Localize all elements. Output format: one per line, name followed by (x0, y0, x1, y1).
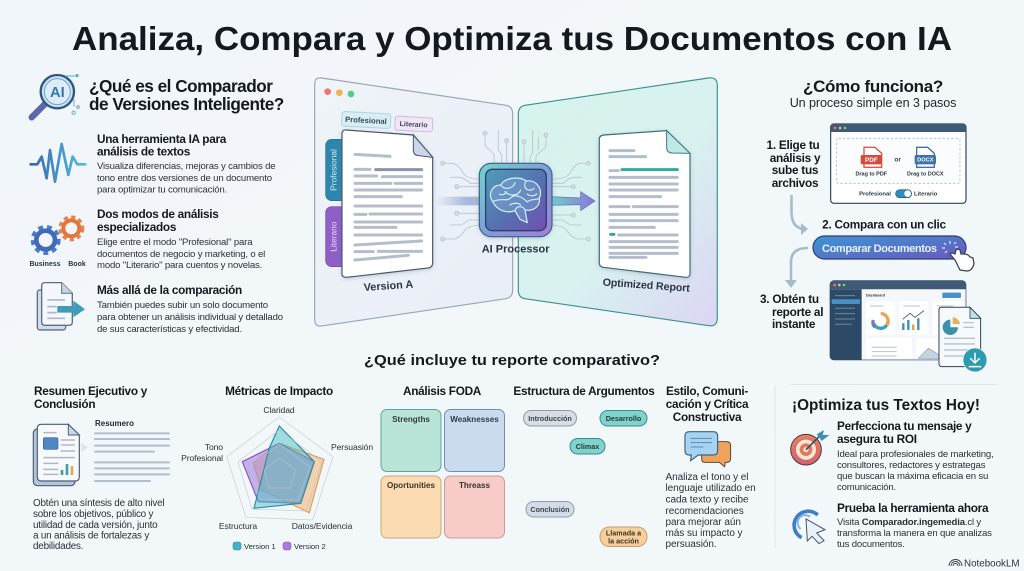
text block: dos modos (97, 207, 265, 271)
step 1 upload window: Literario (914, 192, 938, 198)
toggle (896, 190, 912, 198)
step 3 label: 3. Obtén tu (760, 292, 819, 306)
quadrant: oportunities (381, 476, 441, 538)
icon: summary document: Resumero (95, 419, 134, 428)
icon: AI magnifier: AI (50, 85, 65, 101)
text block: perfecciona: comunicación. (837, 482, 896, 493)
step 3 label: instante (772, 317, 816, 331)
icon: report with download (939, 307, 987, 372)
step 1 upload window: or (894, 157, 901, 164)
heading: estilo: Estilo, Comuni- (666, 384, 748, 398)
text block: una herramienta: análisis de textos (97, 144, 191, 158)
step 1 upload window: Drag to DOCX (907, 172, 944, 178)
step 3 label: reporte al (772, 305, 823, 319)
text block: perfecciona: consultores, redactores y estrategas (837, 460, 986, 471)
text block: estilo: recomendaciones (666, 506, 744, 517)
text block: estilo: para mejorar aún (666, 517, 741, 528)
text block: resumen: sobre los objetivos, público y (33, 509, 154, 520)
panel: métricas de impacto (181, 384, 373, 551)
radar legend (233, 542, 326, 551)
tab: literario (395, 116, 433, 132)
heading: FODA: Análisis FODA (403, 384, 482, 398)
text block: estilo: lenguaje utilizado en (666, 483, 756, 494)
compare button (813, 236, 966, 259)
quadrant: weaknesses: Weaknesses (450, 415, 499, 424)
text block: una herramienta: Una herramienta IA para (97, 132, 227, 146)
circuit connectors (441, 130, 590, 241)
tab: literario: Literario (399, 121, 428, 129)
heading: qué es: ¿Qué es el Comparador (89, 76, 273, 96)
icon: document with arrow (37, 283, 85, 330)
step 2 label: 2. Compara con un clic (822, 218, 947, 232)
text block: una herramienta: para optimizar tu comunicación. (97, 184, 227, 196)
panel: version A (315, 78, 513, 326)
section heading: qué incluye: ¿Qué incluye tu reporte comparativo? (364, 352, 660, 369)
quadrant: weaknesses (444, 410, 504, 472)
text block: prueba: transforma la manera en que analizas (837, 528, 992, 539)
icon: AI processor brain (479, 163, 552, 237)
text block: una herramienta: Visualiza diferencias, mejoras y cambios de (97, 161, 275, 172)
step 3 dashboard: Dashboard (866, 294, 885, 298)
text block: prueba: Prueba la herramienta ahora (837, 501, 989, 515)
step 1 label: análisis y (770, 151, 821, 165)
text block: perfecciona: asegura tu ROI (837, 432, 917, 446)
panel: resumen ejecutivo (33, 384, 169, 552)
text block: resumen: debilidades. (33, 541, 83, 552)
node: introducción (524, 410, 576, 426)
text block: dos modos: documentos de negocio y marketing, o el (97, 249, 265, 260)
arrow: output flow (552, 192, 595, 211)
text block: más allá: Más allá de la comparación (97, 283, 242, 297)
icon: PDF: PDF (865, 157, 878, 164)
node: introducción: Introducción (528, 414, 572, 423)
compare button: Comparar Documentos (822, 243, 937, 255)
heading: cómo funciona: ¿Cómo funciona? (803, 77, 943, 96)
arrow: step 2 to 3 (785, 248, 808, 288)
icon: AI magnifier (32, 74, 79, 117)
central diagram: version comparison (315, 78, 717, 326)
radar axis labels: Tono (205, 442, 223, 452)
tab: profesional: Profesional (345, 115, 387, 126)
text block: perfecciona: Perfecciona tu mensaje y (837, 419, 972, 433)
icon: target (791, 430, 829, 465)
icon: waveform (31, 144, 85, 182)
icon: click cursor (794, 511, 825, 544)
quadrant: strengths: Strengths (392, 415, 430, 424)
text block: estilo: Analiza el tono y el (666, 472, 748, 483)
heading: cómo funciona (790, 77, 956, 110)
quadrant: strengths (381, 410, 441, 472)
step 3 dashboard (830, 281, 987, 372)
text block: estilo: más su impacto y (666, 528, 743, 539)
text block: estilo: cada texto y recibe (666, 494, 749, 506)
node: llamada a la acción (600, 527, 647, 546)
heading: estilo: Constructiva (673, 410, 742, 424)
icon: gears: Business (29, 261, 61, 268)
text block: perfecciona: que buscan la máxima eficacia en su (837, 471, 988, 482)
text block: una herramienta: tono entre dos versiones de un documento (97, 173, 272, 184)
text block: estilo: persuasión. (666, 539, 717, 550)
text block: dos modos: especializados (97, 220, 177, 234)
heading: cómo funciona: Un proceso simple en 3 pasos (790, 96, 956, 110)
radar axis labels: Datos/Evidencia (292, 521, 353, 531)
radar chart (227, 417, 333, 520)
heading: optimiza: ¡Optimiza tus Textos Hoy! (792, 397, 980, 414)
text block: prueba (837, 501, 992, 550)
text block: más allá: También puedes subir un solo documento (97, 300, 268, 311)
text block: más allá: para obtener un análisis individual y detallado (97, 312, 283, 323)
step 1 upload window (831, 124, 966, 203)
node: climax: Climax (576, 442, 599, 451)
node: llamada a la acción: Llamada a (606, 528, 642, 538)
quadrant: threats (444, 476, 504, 538)
panel: cómo funciona (760, 77, 987, 372)
text block: perfecciona: Ideal para profesionales de marketing, (837, 449, 994, 460)
panel: estilo y comunicación (666, 384, 756, 550)
node: conclusión: Conclusión (530, 505, 570, 514)
node: climax (570, 438, 605, 454)
icon: speech bubbles (685, 432, 731, 467)
panel: optimized report (518, 78, 717, 326)
text block: resumen: Obtén una síntesis de alto nivel (33, 498, 164, 509)
text block: una herramienta (97, 132, 275, 196)
radar legend: Version 1 (244, 542, 276, 551)
step 1 label: archivos (772, 176, 819, 190)
text block: dos modos: modo "Literario" para cuentos y novelas. (97, 260, 262, 271)
heading: resumen: Resumen Ejecutivo y (34, 384, 148, 398)
quadrant: threats: Threass (459, 481, 491, 490)
radar axis labels: Persuasión (331, 442, 373, 452)
panel: análisis FODA (381, 384, 504, 538)
label: version A: Version A (363, 279, 414, 294)
arrow: input flow (436, 197, 479, 205)
heading: qué es: de Versiones Inteligente? (89, 94, 284, 114)
panel: qué es el comparador (29, 74, 284, 335)
tab: profesional (341, 111, 391, 129)
radar axis labels: Profesional (181, 453, 223, 463)
side tab: literario: Literario (329, 221, 339, 252)
document: optimized (599, 131, 690, 277)
title: Analiza, Compara y Optimiza tus Documentos con IA (72, 20, 952, 57)
node: desarrollo: Desarrollo (606, 414, 642, 423)
text block: resumen: utilidad de cada versión, junto (33, 520, 158, 531)
icon: hand cursor (950, 249, 974, 271)
text block: prueba: Visita (837, 517, 862, 528)
heading: métricas: Métricas de Impacto (225, 384, 333, 398)
heading: resumen: Conclusión (34, 397, 95, 411)
heading: estructura: Estructura de Argumentos (513, 384, 655, 398)
quadrant: oportunities: Oportunities (387, 481, 436, 490)
step 1 label: sube tus (772, 163, 819, 177)
side tab: literario (326, 207, 352, 267)
step 1 upload window: Profesional (859, 192, 891, 198)
text block: más allá: de sus características y efectividad. (97, 324, 242, 335)
icon: gears (29, 217, 86, 268)
panel: optimiza tus textos hoy (791, 397, 994, 550)
heading: estilo: cación y Crítica (666, 397, 749, 411)
radar legend: Version 2 (294, 542, 326, 551)
radar axis labels (181, 405, 373, 531)
arrow: step 1 to 2 (792, 195, 808, 235)
text block: dos modos: Dos modos de análisis (97, 207, 219, 221)
node: desarrollo (600, 410, 647, 426)
radar axis labels: Estructura (219, 521, 257, 531)
text block: resumen: a un análisis de fortalezas y (33, 530, 149, 542)
text block: más allá (97, 283, 283, 335)
text block: perfecciona (837, 419, 994, 493)
side tab: profesional: Profesional (329, 149, 339, 191)
badge: NotebookLM: NotebookLM (964, 558, 1020, 570)
panel: estructura de argumentos (513, 384, 655, 546)
text block: prueba: Comparador.ingemedia.cl y (862, 517, 981, 528)
label: optimized report: Optimized Report (602, 277, 691, 295)
icon: summary document (33, 419, 169, 486)
radar axis labels: Claridad (263, 405, 295, 415)
icon: DOCX: DOCX (917, 158, 934, 164)
label: AI Processor: AI Processor (482, 244, 550, 256)
text block: dos modos: Elige entre el modo "Profesional" para (97, 237, 253, 248)
step 1 label: 1. Elige tu (767, 138, 820, 152)
text block: prueba: tus documentos. (837, 539, 905, 550)
icon: gears: Book (68, 261, 86, 268)
document: version A (342, 130, 433, 277)
step 1 upload window: Drag to PDF (855, 172, 888, 178)
node: conclusión (526, 502, 574, 517)
side tab: profesional (326, 139, 352, 201)
node: llamada a la acción: la acción (608, 536, 639, 546)
